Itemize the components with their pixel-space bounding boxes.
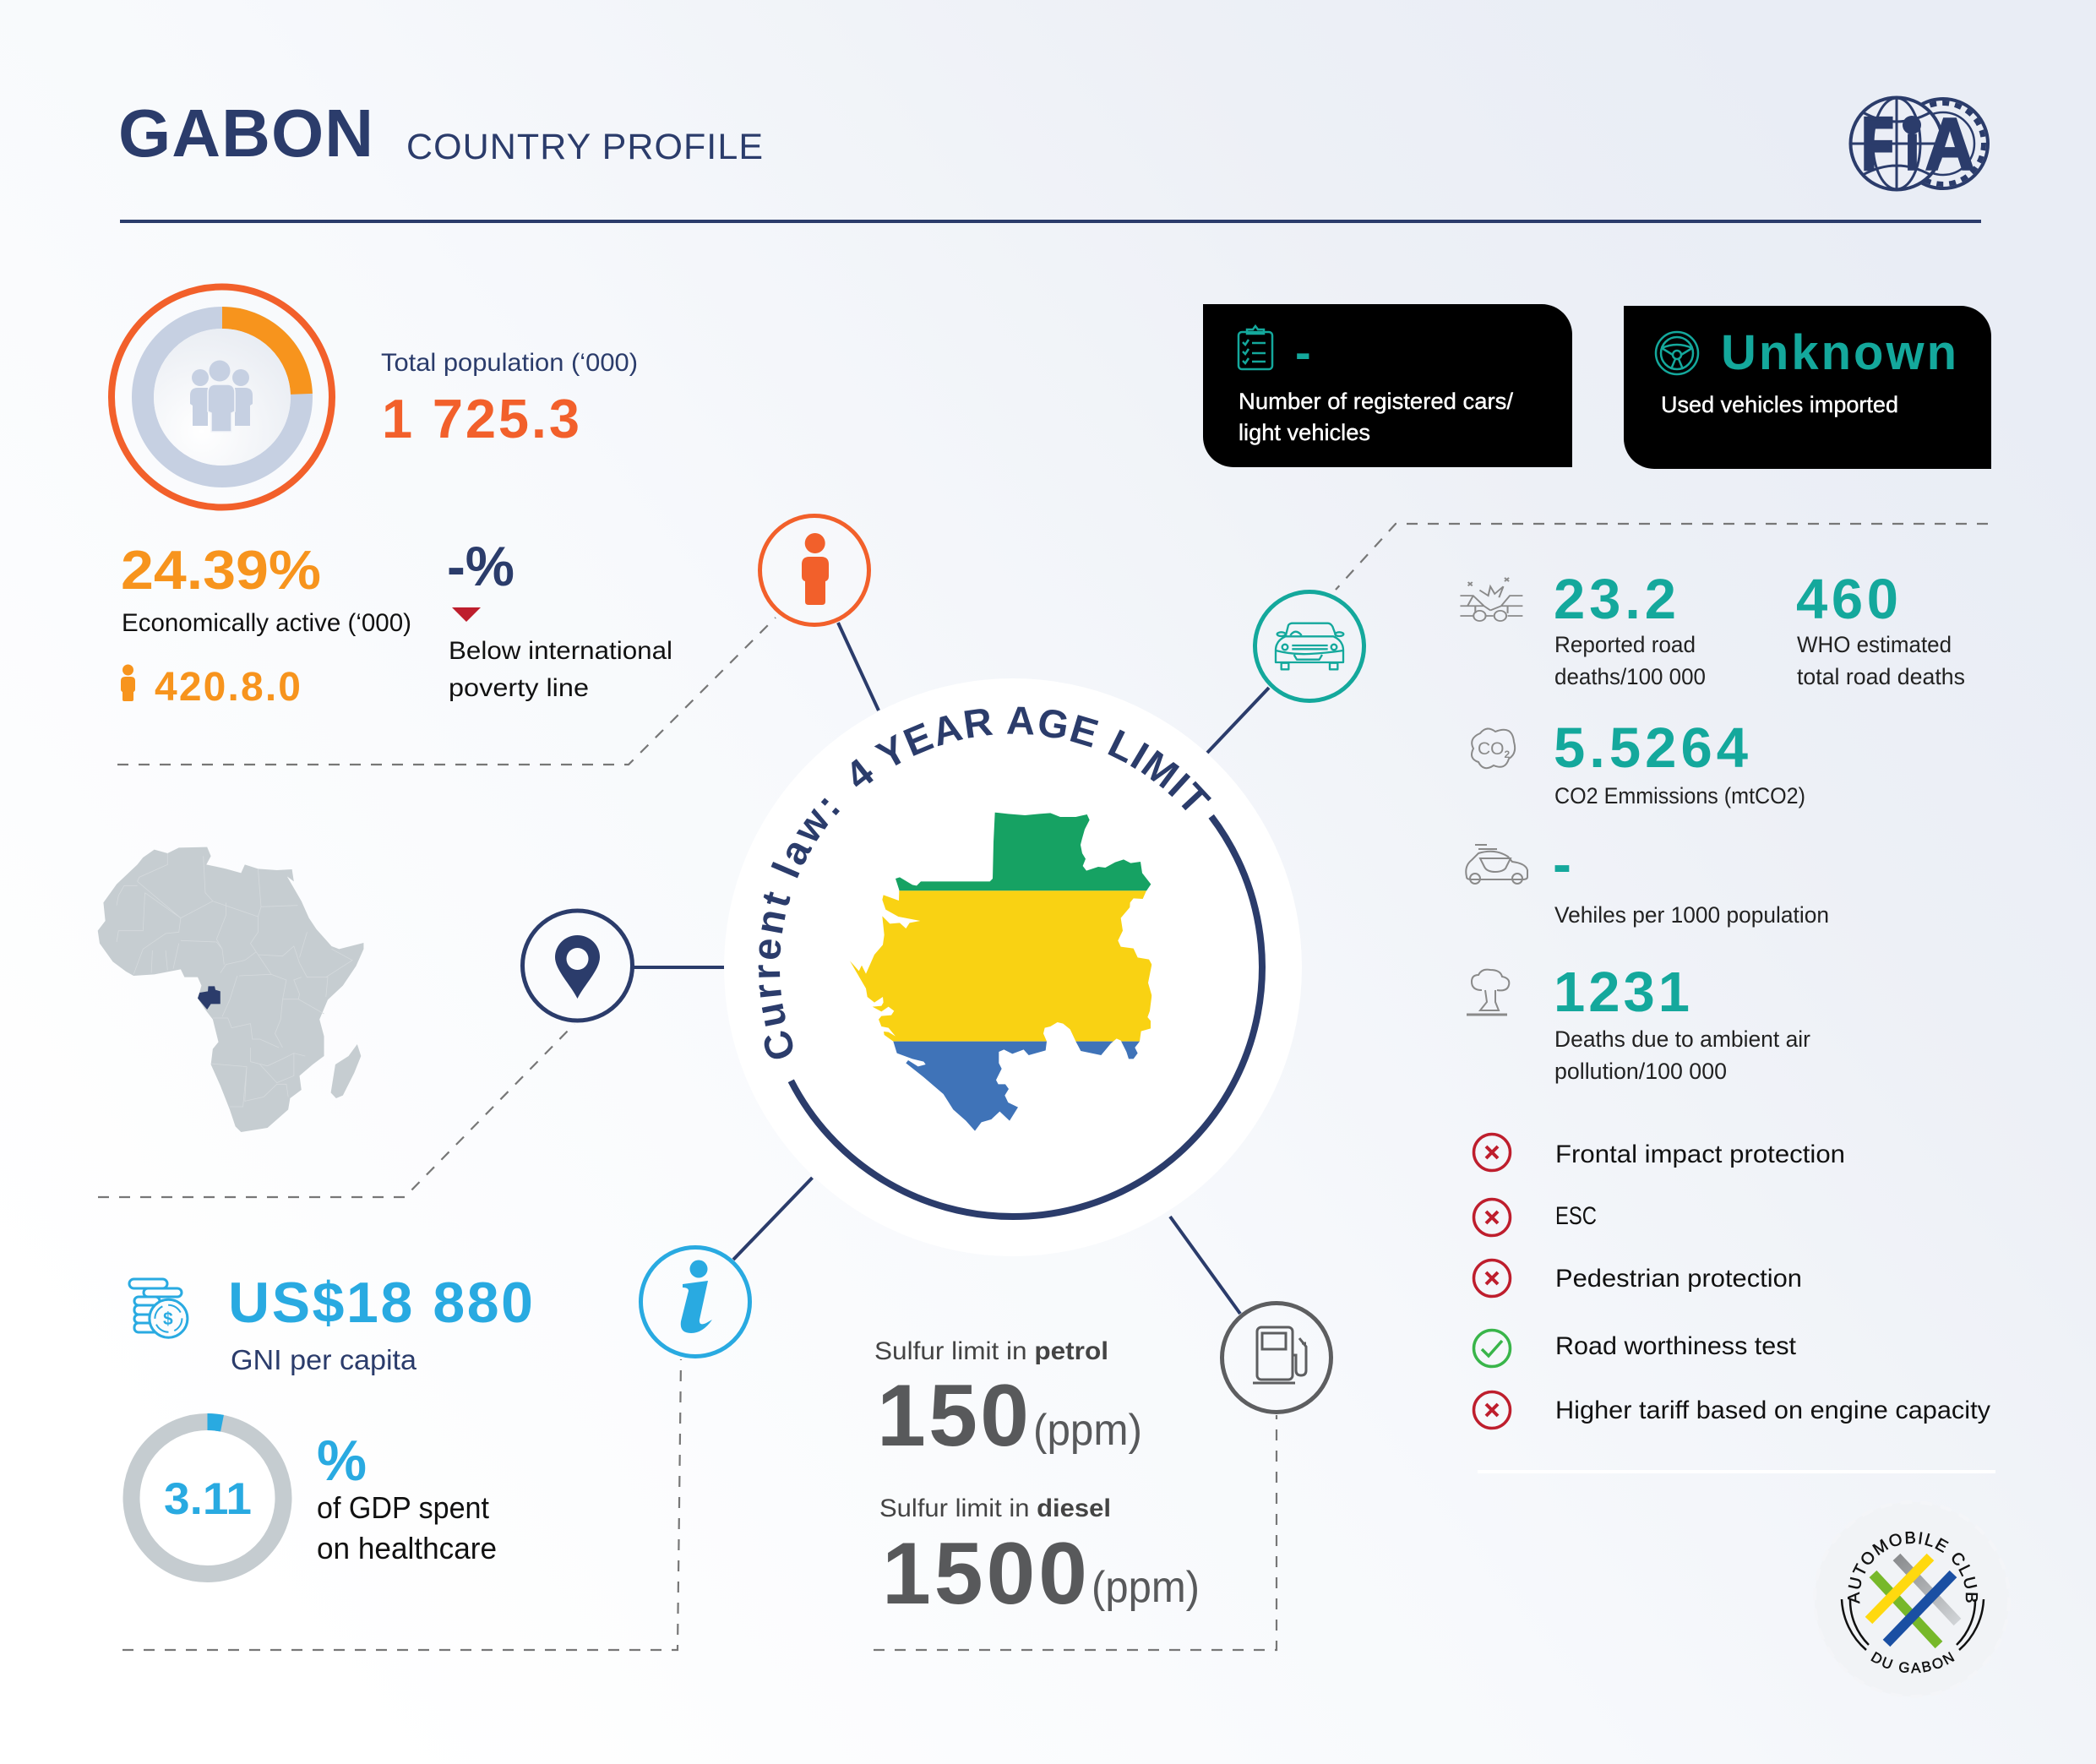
petrol unit: (ppm) xyxy=(1033,1406,1142,1455)
population label: Total population (‘000) xyxy=(381,349,638,377)
label: ESC: ESC xyxy=(1555,1202,1597,1230)
logo: FIA: A xyxy=(1925,104,1974,185)
icon: small person xyxy=(121,664,135,701)
WHO estimated label: total road deaths xyxy=(1797,664,1965,689)
healthcare label: of GDP spent xyxy=(317,1490,489,1525)
CO2 label: CO2 Emmissions (mtCO2) xyxy=(1554,783,1805,808)
used vehicles value: Unknown xyxy=(1721,325,1957,380)
healthcare percent sign: % xyxy=(317,1429,367,1493)
icon: dollar sign: $ xyxy=(163,1309,173,1329)
icon: location pin circle xyxy=(522,911,632,1021)
icon: air pollution cloud xyxy=(1467,970,1509,1015)
icon: cross ESC xyxy=(1473,1200,1511,1235)
icon: car side xyxy=(1466,845,1527,884)
icon: CO2 cloud: CO xyxy=(1478,739,1504,759)
used vehicles label: Used vehicles imported xyxy=(1661,392,1898,417)
panel: road safety statistics xyxy=(1460,568,1965,1084)
deaths reported label: deaths/100 000 xyxy=(1554,664,1706,689)
dashed connector: road safety xyxy=(1336,524,1988,590)
icon: car crash xyxy=(1460,578,1522,621)
vehicles per 1000 value: - xyxy=(1553,832,1571,895)
registered cars label xyxy=(1239,389,1514,445)
deaths reported value: 23.2 xyxy=(1554,568,1676,631)
poverty label xyxy=(449,637,672,702)
curved heading: age limit xyxy=(759,706,1211,1059)
dashed connector: population xyxy=(117,618,776,765)
air pollution label: pollution/100 000 xyxy=(1554,1059,1727,1084)
registered cars value: - xyxy=(1295,325,1311,378)
icon: info circle xyxy=(640,1247,750,1357)
diesel unit: (ppm) xyxy=(1092,1563,1200,1612)
hub: central circle xyxy=(724,678,1302,1220)
dashed connector: fuel xyxy=(874,1415,1277,1650)
icon: CO2 cloud xyxy=(1472,728,1515,768)
deaths reported label: Reported road xyxy=(1554,632,1696,657)
icon: clipboard xyxy=(1239,326,1272,369)
panel: used vehicles xyxy=(1624,306,1991,469)
map: Gabon flag xyxy=(850,813,1152,1130)
icon: cross frontal impact xyxy=(1473,1134,1511,1171)
logo: FIA: i xyxy=(1905,112,1919,183)
map: Africa xyxy=(98,847,363,1132)
icon: check road worthiness xyxy=(1473,1330,1511,1367)
title: GABON: GABON xyxy=(118,95,373,171)
deaths reported label xyxy=(1554,632,1706,689)
diesel value: 1500 xyxy=(882,1525,1087,1623)
logo: Automobile Club du Gabon: DU GABON xyxy=(1870,1651,1955,1673)
healthcare donut chart: 3.11 xyxy=(164,1474,252,1524)
economically active value: 420.8.0 xyxy=(155,665,301,710)
icon: steering wheel xyxy=(1656,332,1698,374)
healthcare label xyxy=(317,1490,497,1565)
registered cars label: Number of registered cars/ xyxy=(1239,389,1514,414)
population donut chart xyxy=(112,287,332,507)
panel: vehicle standards checklist xyxy=(1473,1134,1990,1428)
WHO estimated label xyxy=(1797,632,1965,689)
label: road worthiness: Road worthiness test xyxy=(1555,1332,1797,1360)
subtitle: country profile: COUNTRY PROFILE xyxy=(406,127,763,167)
panel: economy xyxy=(129,1271,533,1574)
healthcare label: on healthcare xyxy=(317,1531,497,1565)
icon: coins xyxy=(129,1279,188,1337)
dashed connector: economy xyxy=(122,1359,681,1650)
logo: FIA: F xyxy=(1862,104,1893,185)
icon: car circle xyxy=(1255,591,1364,701)
air pollution label: Deaths due to ambient air xyxy=(1554,1026,1810,1052)
icon: cross tariff xyxy=(1473,1392,1511,1428)
icon: CO2 cloud: 2 xyxy=(1504,749,1511,760)
icon: person circle xyxy=(760,515,868,625)
registered cars label: light vehicles xyxy=(1239,420,1370,445)
panel: fuel sulfur limits xyxy=(874,1337,1200,1623)
curved heading: age limit: Current law: xyxy=(759,798,840,1059)
panel: registered cars xyxy=(1203,304,1572,467)
air pollution value: 1231 xyxy=(1554,961,1690,1024)
connector lines to hub xyxy=(634,623,1269,1314)
CO2 value: 5.5264 xyxy=(1554,716,1748,780)
icon: cross pedestrian xyxy=(1473,1260,1511,1296)
healthcare donut chart xyxy=(132,1422,284,1574)
curved heading: age limit: 4 YEAR AGE LIMIT xyxy=(852,706,1211,811)
label: frontal impact: Frontal impact protection xyxy=(1555,1141,1845,1168)
petrol label: Sulfur limit in petrol xyxy=(874,1337,1108,1365)
poverty label: Below international xyxy=(449,637,672,665)
GNI label: GNI per capita xyxy=(231,1344,417,1375)
panel: population xyxy=(112,287,672,710)
label: tariff: Higher tariff based on engine capacity xyxy=(1555,1396,1990,1424)
poverty percent: -% xyxy=(447,535,514,597)
icon: fuel pump circle xyxy=(1222,1303,1331,1413)
air pollution label xyxy=(1554,1026,1810,1084)
logo: Automobile Club du Gabon xyxy=(1840,1531,1985,1673)
WHO estimated value: 460 xyxy=(1796,568,1898,631)
dashed connector: location xyxy=(98,1024,574,1197)
logo: Automobile Club du Gabon: AUTOMOBILE CLUB xyxy=(1847,1531,1979,1603)
WHO estimated label: WHO estimated xyxy=(1797,632,1952,657)
poverty label: poverty line xyxy=(449,674,589,702)
economically active label: Economically active (‘000) xyxy=(122,609,411,637)
population value: 1 725.3 xyxy=(382,388,580,449)
economically active percent: 24.39% xyxy=(121,539,321,601)
petrol value: 150 xyxy=(877,1367,1029,1465)
icon: down triangle xyxy=(452,607,481,622)
vehicles per 1000 label: Vehiles per 1000 population xyxy=(1554,902,1829,928)
diesel label: Sulfur limit in diesel xyxy=(879,1494,1111,1522)
GNI value: US$18 880 xyxy=(228,1271,533,1335)
logo: FIA xyxy=(1850,98,1988,189)
label: pedestrian: Pedestrian protection xyxy=(1555,1265,1802,1293)
